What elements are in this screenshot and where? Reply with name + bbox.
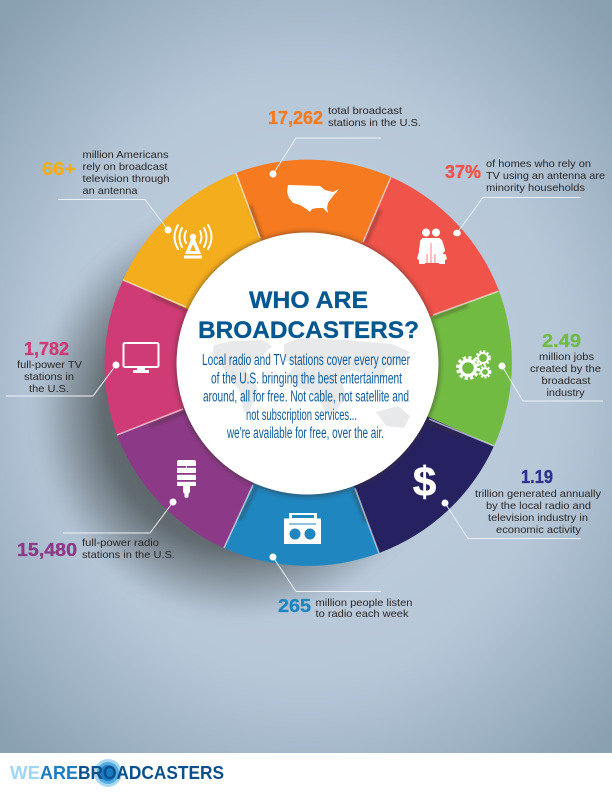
segment: blue: [224, 364, 379, 566]
centre body text: we're available for free, over the air.: [226, 425, 384, 442]
callout: 37%: [445, 158, 605, 236]
centre body text: around, all for free. Not cable, not satellite and: [203, 388, 409, 406]
centre circle: [176, 232, 438, 494]
callout: 15,480: 15,480: [17, 540, 77, 560]
callout: 17,262: total broadcast: [328, 105, 402, 117]
callout: 1.19: television industry in: [488, 512, 588, 524]
callout: 1,782: 1,782: [24, 339, 69, 359]
logo: WE: [10, 762, 40, 783]
callout: 15,480: stations in the U.S.: [82, 549, 175, 561]
ring drop shadow: [32, 204, 448, 620]
heading: [198, 287, 419, 344]
callout: 17,262: 17,262: [268, 108, 323, 128]
logo: ARE: [40, 762, 78, 783]
icon: boombox radio: [284, 513, 321, 544]
callout: 265: to radio each week: [316, 608, 409, 620]
world map watermark: [212, 338, 410, 428]
footer band: [0, 753, 612, 792]
callout: 2.49: 2.49: [542, 331, 581, 351]
callout: 265: million people listen: [316, 597, 413, 609]
callout: 66+: [42, 149, 172, 234]
icon: television monitor: [124, 343, 158, 373]
callout: 66+: rely on broadcast: [82, 161, 168, 173]
callout: 2.49: broadcast: [542, 375, 591, 387]
callout: 2.49: [498, 331, 603, 401]
callout: 17,262: stations in the U.S.: [328, 117, 421, 129]
icon: dollar sign: $: [413, 458, 436, 505]
callout: 1,782: stations in: [24, 371, 74, 383]
callout: 66+: million Americans: [82, 149, 168, 161]
segment: red: [308, 177, 499, 364]
callout: 17,262: [268, 105, 421, 178]
callout: 1,782: full-power TV: [17, 359, 82, 371]
icon: broadcast antenna: [174, 225, 212, 258]
segment: green: [308, 291, 512, 446]
logo: BROADCASTERS: [78, 762, 224, 783]
callout: 37%: of homes who rely on: [486, 158, 591, 170]
callout: 15,480: full-power radio: [82, 537, 159, 549]
callout: 1.19: [442, 467, 602, 538]
centre body text: [202, 352, 410, 442]
ring of coloured segments: [105, 160, 512, 566]
segment: yellow: [123, 173, 308, 364]
centre body text: of the U.S. bringing the best entertainment: [211, 370, 402, 388]
callout: 37%: TV using an antenna are: [486, 170, 605, 182]
callout: 1.19: trillion generated annually: [475, 488, 602, 500]
centre body text: Local radio and TV stations cover every corner: [202, 352, 410, 369]
callout: 66+: television through: [82, 173, 170, 185]
callout: 1,782: [6, 339, 120, 396]
callout: 2.49: million jobs: [539, 351, 594, 363]
logo: [10, 759, 224, 787]
callout: 1.19: 1.19: [521, 467, 553, 487]
heading: BROADCASTERS?: [198, 317, 419, 344]
segment: orange: [236, 160, 391, 364]
callout: 37%: minority households: [486, 182, 585, 194]
segment: pink: [105, 280, 308, 435]
segment: navy: [308, 364, 494, 553]
icon: USA map: [287, 185, 339, 213]
callout: 265: 265: [278, 596, 311, 616]
callout: 66+: an antenna: [82, 185, 138, 197]
icon: gears: [458, 351, 490, 378]
callout: 2.49: industry: [546, 387, 585, 399]
centre body text: not subscription services...: [246, 407, 357, 424]
callout: 1.19: by the local radio and: [486, 500, 591, 512]
icon: family: [417, 228, 447, 264]
callout: 1.19: economic activity: [496, 524, 582, 536]
callout: 265: [270, 554, 413, 620]
callout: 37%: 37%: [445, 162, 481, 182]
callout: 1,782: the U.S.: [29, 383, 69, 395]
centre circle shadow: [175, 232, 440, 496]
icon: microphone: [177, 460, 196, 498]
heading: WHO ARE: [249, 287, 368, 314]
callout: 15,480: [17, 498, 176, 561]
segment: purple: [117, 364, 308, 548]
callout: 66+: 66+: [42, 159, 76, 179]
callout: 2.49: created by the: [530, 363, 601, 375]
